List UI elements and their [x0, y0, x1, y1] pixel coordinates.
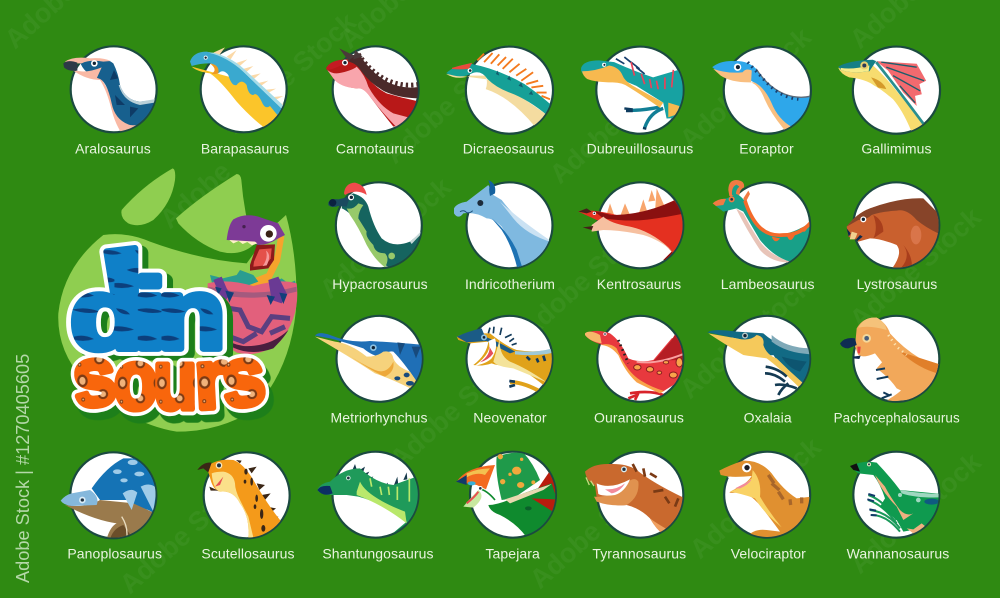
panel: Neovenator	[457, 316, 555, 425]
word sours: u	[153, 335, 197, 427]
label: Ouranosaurus: Ouranosaurus	[594, 409, 684, 425]
icon: Carnotaurus	[326, 46, 420, 132]
word sours: s	[68, 328, 120, 425]
panel: Shantungosaurus	[317, 452, 434, 561]
watermarks: Adobe	[154, 156, 236, 234]
word din: i	[133, 259, 167, 370]
label: Metriorhynchus: Metriorhynchus	[330, 409, 428, 425]
watermarks: Adobe Stock	[684, 431, 827, 564]
label: Tapejara: Tapejara	[485, 545, 540, 561]
watermarks: Adobe Stock	[524, 461, 667, 594]
label: Scutellosaurus: Scutellosaurus	[201, 545, 295, 561]
label: Velociraptor: Velociraptor	[731, 545, 806, 561]
word din: n	[157, 259, 226, 370]
panel: Velociraptor	[719, 452, 812, 561]
word sours: o	[114, 335, 158, 427]
panel: Aralosaurus	[63, 46, 160, 156]
icon: Shantungosaurus	[317, 452, 422, 538]
panel: Ouranosaurus	[585, 316, 687, 425]
word din: d	[70, 259, 143, 370]
icon: Dubreuillosaurus	[581, 47, 689, 134]
panel: Metriorhynchus	[315, 316, 428, 425]
word sours: s	[217, 328, 269, 425]
label: Indricotherium: Indricotherium	[465, 276, 555, 292]
icon: Wannanosaurus	[850, 452, 942, 538]
label: Hypacrosaurus: Hypacrosaurus	[332, 276, 428, 292]
panel: Oxalaia	[707, 316, 812, 425]
panel: Carnotaurus	[326, 46, 420, 156]
watermarks: Adobe Stock	[314, 171, 457, 304]
icon: Metriorhynchus	[315, 316, 425, 402]
label: Neovenator: Neovenator	[473, 409, 547, 425]
watermarks: Adobe Stock	[844, 446, 987, 579]
icon: Oxalaia	[707, 316, 812, 402]
icon: Barapasaurus	[190, 46, 288, 132]
word sours	[68, 328, 269, 427]
label: Tyrannosaurus: Tyrannosaurus	[592, 545, 686, 561]
icon: Ouranosaurus	[585, 316, 687, 402]
label: Dubreuillosaurus: Dubreuillosaurus	[587, 140, 693, 156]
label: Aralosaurus: Aralosaurus	[75, 140, 151, 156]
label: Dicraeosaurus: Dicraeosaurus	[463, 140, 554, 156]
label: Lystrosaurus: Lystrosaurus	[857, 276, 937, 292]
watermarks: Adobe Stock	[514, 211, 657, 344]
label: Barapasaurus: Barapasaurus	[201, 140, 289, 156]
panel: Tapejara	[456, 452, 558, 561]
watermarks: Adobe Stock	[674, 271, 817, 404]
panel: Dicraeosaurus	[446, 47, 554, 156]
icon: Kentrosaurus	[578, 182, 687, 268]
watermarks: Adobe Stock	[844, 201, 987, 334]
icon: Velociraptor	[719, 452, 812, 538]
panel: Pachycephalosaurus	[834, 316, 960, 425]
watermarks: Adobe Stock	[114, 466, 257, 598]
icon: Eoraptor	[712, 47, 812, 134]
icon: Tapejara	[456, 452, 558, 538]
icon: Tyrannosaurus	[585, 452, 685, 538]
watermarks: Adobe Stock	[544, 56, 687, 189]
icon: Gallimimus	[838, 47, 940, 134]
label: Lambeosaurus: Lambeosaurus	[721, 276, 815, 292]
label: Oxalaia: Oxalaia	[744, 409, 792, 425]
panel: Tyrannosaurus	[585, 452, 686, 561]
word din: d	[70, 259, 143, 370]
panel: Gallimimus	[838, 47, 940, 156]
icon: Indricotherium	[454, 180, 555, 269]
icon: Scutellosaurus	[197, 452, 290, 538]
vertical credit text: Adobe Stock | #1270405605	[13, 354, 33, 583]
icon: Hypacrosaurus	[328, 182, 425, 268]
label: Carnotaurus: Carnotaurus	[336, 140, 414, 156]
icon: Neovenator	[457, 316, 555, 402]
label: Pachycephalosaurus: Pachycephalosaurus	[834, 410, 960, 425]
label: Eoraptor: Eoraptor	[739, 140, 794, 156]
panel: Hypacrosaurus	[328, 182, 428, 292]
watermarks: Adobe Stock	[384, 341, 527, 474]
baby dinosaur in egg	[208, 215, 297, 354]
panel: Kentrosaurus	[578, 182, 687, 292]
label: Gallimimus: Gallimimus	[861, 140, 932, 156]
watermarks: Adobe Stock	[219, 6, 362, 139]
icon: Panoplosaurus	[61, 452, 158, 539]
word sours: s	[217, 328, 269, 425]
panel: Dubreuillosaurus	[581, 47, 693, 156]
egg	[210, 270, 258, 288]
label: Panoplosaurus: Panoplosaurus	[67, 545, 162, 561]
label: Kentrosaurus: Kentrosaurus	[597, 276, 681, 292]
panel: Wannanosaurus	[847, 452, 949, 561]
icon: Lambeosaurus	[713, 180, 812, 268]
panel: Lambeosaurus	[713, 180, 815, 292]
word din	[70, 248, 226, 370]
icon: Pachycephalosaurus	[840, 316, 942, 402]
icon: Aralosaurus	[63, 46, 160, 133]
word sours: s	[68, 328, 120, 425]
word sours: r	[192, 332, 229, 427]
panel: Scutellosaurus	[197, 452, 295, 561]
panel: Indricotherium	[454, 180, 555, 292]
panel: Barapasaurus	[190, 46, 289, 156]
word sours: r	[192, 332, 229, 427]
icon: Lystrosaurus	[847, 182, 942, 269]
watermarks: Adobe Stock	[379, 36, 522, 169]
footprint background	[58, 168, 297, 432]
word din: n	[157, 259, 226, 370]
panel: Lystrosaurus	[847, 182, 942, 292]
panel: Eoraptor	[712, 47, 812, 156]
label: Wannanosaurus: Wannanosaurus	[847, 545, 949, 561]
word sours: u	[153, 335, 197, 427]
icon: Dicraeosaurus	[446, 47, 553, 134]
label: Shantungosaurus: Shantungosaurus	[322, 545, 434, 561]
panel: Panoplosaurus	[61, 452, 162, 561]
logo: dinosaurs	[58, 168, 297, 432]
word sours: o	[114, 335, 158, 427]
watermarks: Adobe Stock	[674, 21, 817, 154]
word din: i	[133, 259, 167, 370]
